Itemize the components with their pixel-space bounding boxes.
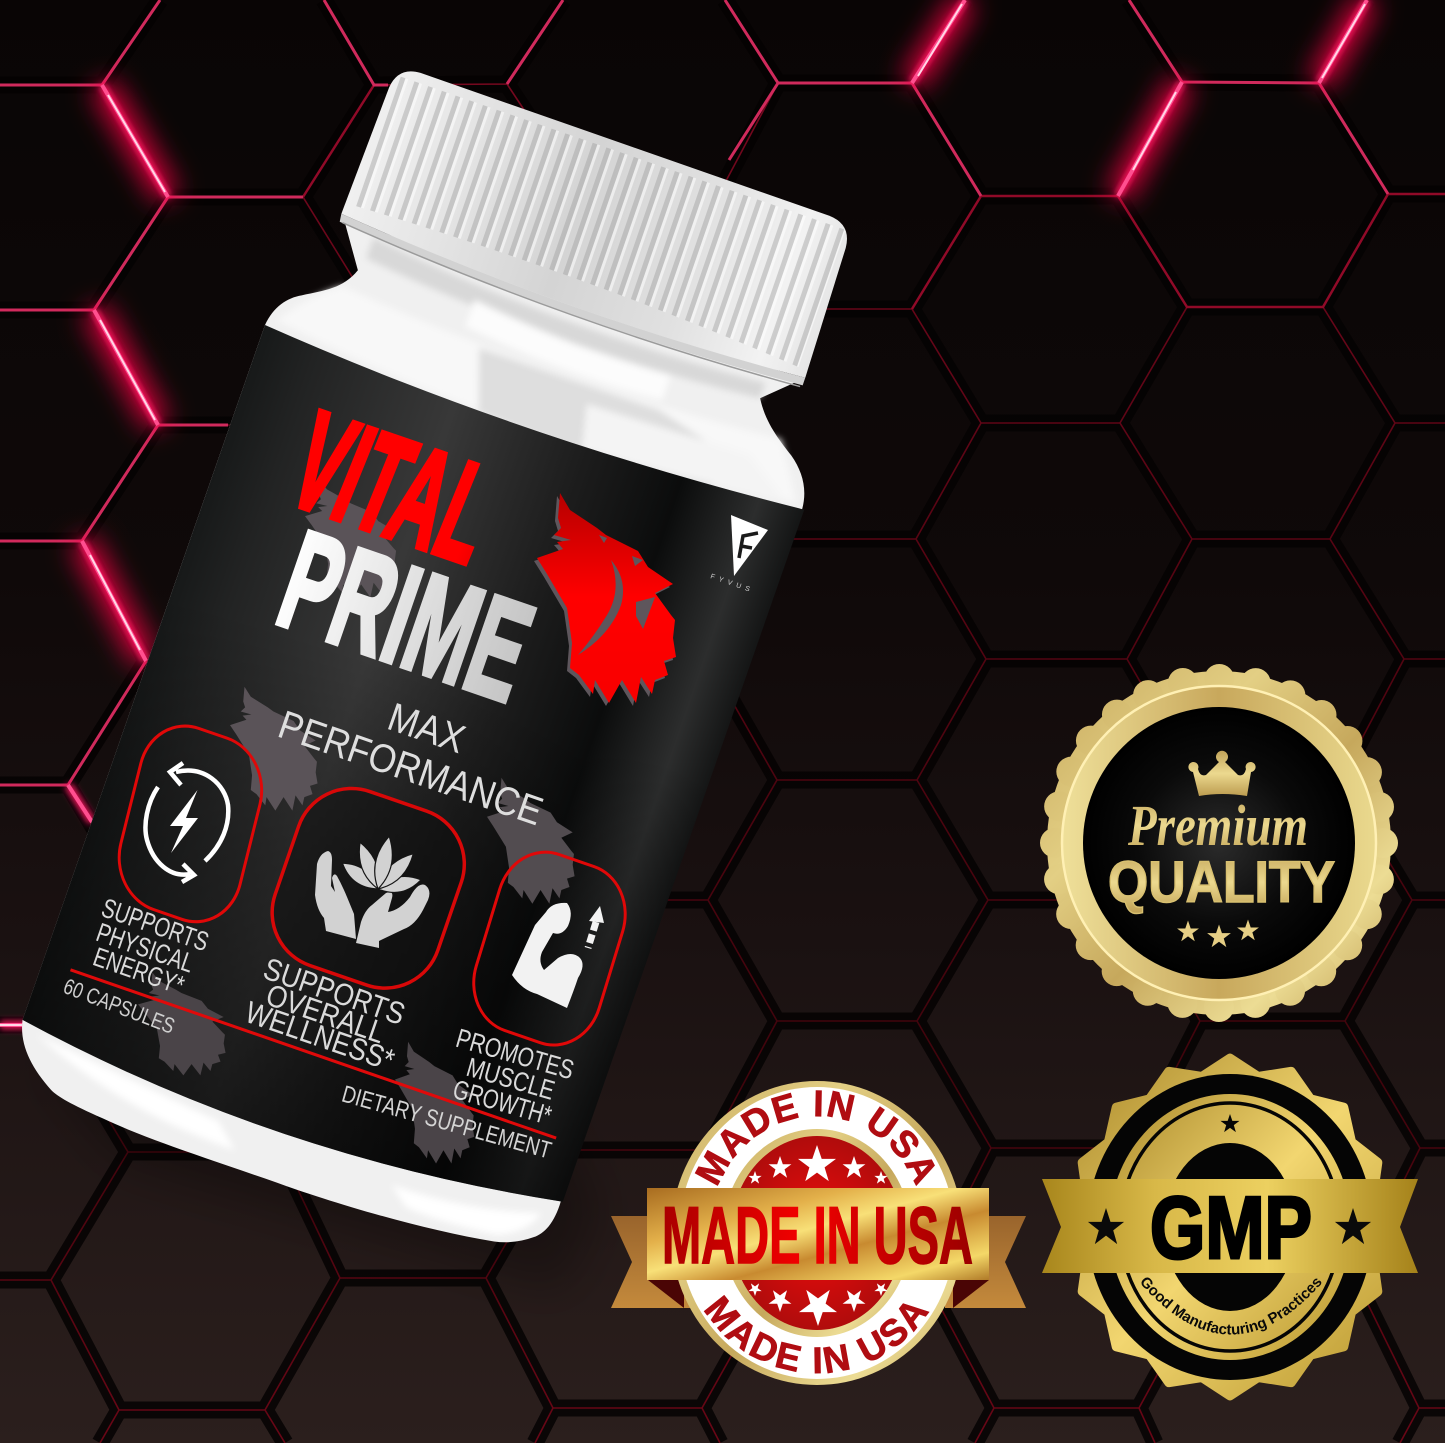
caption: promotes muscle growth: GROWTH* — [450, 1074, 555, 1131]
premium quality badge — [1047, 671, 1391, 1015]
caption: supports overall wellness — [241, 950, 414, 1078]
gold band — [1042, 1179, 1418, 1273]
badge text: QUALITY: QUALITY — [1108, 850, 1335, 915]
brand logo triangle — [709, 515, 768, 595]
bottle body — [0, 205, 843, 1273]
ribbon text: MADE IN USA — [662, 1191, 973, 1281]
red divider line — [70, 970, 556, 1138]
benefit frame: energy — [108, 713, 273, 935]
bottle neck shading — [269, 217, 833, 523]
icon: hands and lotus — [315, 827, 432, 948]
top star — [1220, 1114, 1240, 1132]
label lower shading — [15, 323, 804, 1228]
subtitle: PERFORMANCE: PERFORMANCE — [273, 703, 548, 834]
subtitle: MAX: MAX — [382, 695, 470, 762]
bottle shadow — [40, 1000, 600, 1290]
icon: crown — [1188, 751, 1256, 796]
red wolf head logo — [534, 493, 676, 706]
gold ribbon — [647, 1188, 989, 1280]
dietary supplement line: DIETARY SUPPLEMENT — [339, 1081, 554, 1165]
capsule count: 60 CAPSULES — [60, 973, 178, 1039]
caption: supports overall wellness: SUPPORTS — [259, 951, 410, 1032]
caption: promotes muscle growth: MUSCLE — [463, 1052, 558, 1106]
caption: promotes muscle growth — [439, 1023, 577, 1133]
icon: flexed arm and arrow — [512, 903, 604, 1008]
caption: promotes muscle growth: PROMOTES — [453, 1023, 577, 1085]
product name: VITAL: VITAL — [272, 383, 516, 592]
caption: supports physical energy: PHYSICAL — [93, 917, 198, 979]
supplement bottle — [0, 51, 898, 1274]
band stars — [1088, 1208, 1371, 1244]
benefit frame: wellness — [257, 773, 479, 1003]
badge text: Premium: Premium — [1127, 793, 1308, 858]
caption: supports physical energy: SUPPORTS — [98, 893, 213, 957]
GMP text: GMP — [1150, 1178, 1312, 1277]
curved text bottom: MADE IN USA — [704, 1294, 930, 1374]
badge stars — [1177, 920, 1259, 947]
product name: PRIME: PRIME — [262, 500, 550, 731]
benefit frame: muscle — [461, 839, 638, 1058]
black label — [15, 323, 804, 1228]
ghost wolf 4 — [138, 972, 226, 1075]
base highlights — [22, 1034, 542, 1251]
brand logo triangle: FYVUS — [709, 573, 755, 595]
ghost wolf 5 — [395, 1042, 474, 1164]
bottle cap — [335, 63, 858, 394]
ghost wolf 3 — [487, 778, 575, 904]
curved text top: MADE IN USA — [694, 1090, 935, 1186]
white stars — [748, 1145, 888, 1326]
GMP badge — [1042, 1054, 1418, 1400]
made in USA badge — [611, 1081, 1026, 1385]
caption: supports overall wellness: OVERALL — [262, 977, 389, 1050]
ghost wolf 1 — [305, 480, 397, 597]
icon: energy cycle and bolt — [145, 763, 228, 882]
curved caption: Good Manufacturing Practices — [1142, 1278, 1322, 1335]
ribbon tails — [611, 1216, 1026, 1308]
caption: supports physical energy: ENERGY* — [89, 942, 188, 1001]
ghost wolf 2 — [230, 687, 318, 811]
caption: supports overall wellness: WELLNESS* — [241, 994, 399, 1078]
caption: supports physical energy — [82, 893, 213, 1004]
